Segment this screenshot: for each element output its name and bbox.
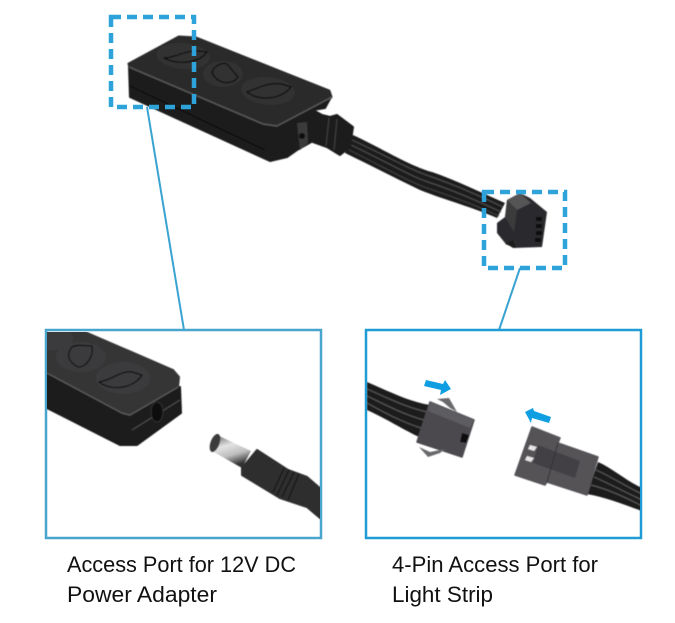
caption: light strip port: Light Strip [392, 582, 493, 607]
photo: left connector [367, 382, 474, 457]
arrow: right-pointing [424, 380, 451, 395]
leader line to power port panel [147, 107, 184, 330]
panel: light strip connector [366, 330, 642, 538]
strain relief [313, 110, 353, 155]
leader line to light strip panel [499, 268, 520, 330]
arrow: left-pointing [525, 408, 551, 423]
controller box [129, 37, 332, 161]
panel: power port [33, 326, 322, 538]
caption: light strip port [392, 552, 598, 607]
callout: dashed highlight over power port [111, 17, 194, 107]
caption: light strip port: 4-Pin Access Port for [392, 552, 598, 577]
photo: controller with cable [129, 37, 547, 248]
callout: dashed highlight over 4-pin connector [484, 192, 565, 268]
photo: DC plug [208, 433, 322, 518]
caption: power port: Power Adapter [67, 582, 217, 607]
caption: power port [67, 552, 296, 607]
photo: controller end [47, 332, 183, 447]
cable [345, 135, 505, 218]
caption: power port: Access Port for 12V DC [67, 552, 296, 577]
photo: right connector [515, 427, 642, 511]
4-pin connector [497, 193, 547, 248]
